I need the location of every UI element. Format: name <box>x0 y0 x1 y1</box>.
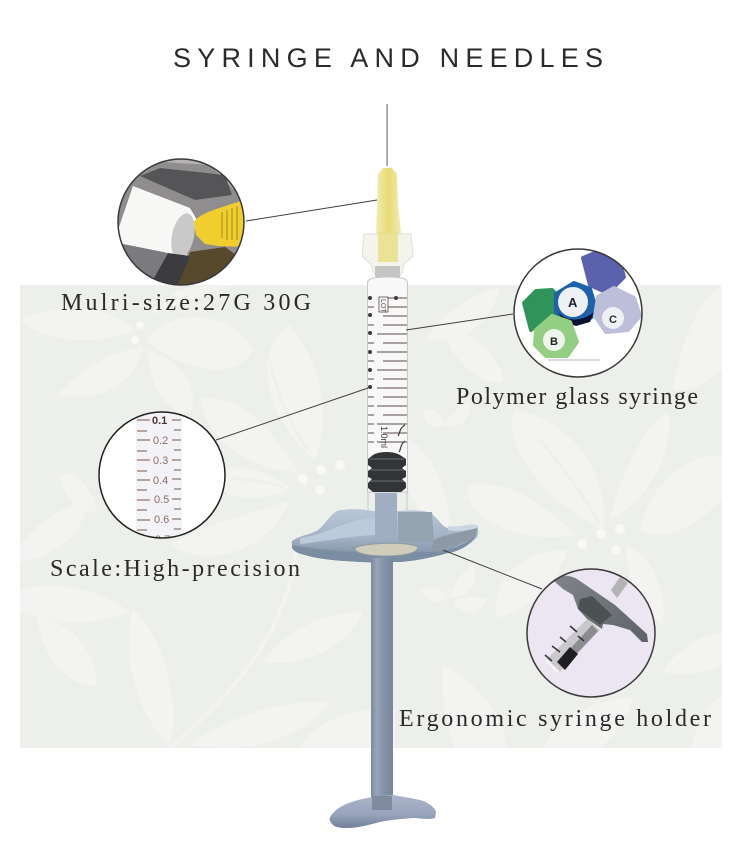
callout: scale close-up: 0.6 <box>154 514 169 526</box>
label: polymer glass syringe: Polymer glass syringe <box>456 384 698 410</box>
callout: polymer spheres: C <box>609 314 617 326</box>
syringe: LOT <box>379 299 386 313</box>
callout: scale close-up: 0.7 <box>155 534 170 546</box>
callout: scale close-up: 0.5 <box>154 494 169 506</box>
title: SYRINGE AND NEEDLES <box>173 43 603 73</box>
callout: scale close-up: 0.1 <box>152 415 167 427</box>
needle hub <box>376 168 401 268</box>
barrel <box>368 277 408 492</box>
plunger thumb rest <box>330 795 436 828</box>
callout: needle close-up <box>118 159 245 285</box>
barrel dots <box>368 296 398 389</box>
background panel: floral pattern <box>20 285 722 748</box>
callout: polymer spheres: A <box>568 295 578 310</box>
label: multi-size: Mulri-size:27G 30G <box>61 290 311 316</box>
callout: scale close-up: 0.3 <box>153 455 168 467</box>
needle <box>386 104 388 166</box>
rubber stopper <box>368 452 406 492</box>
label: scale: Scale:High-precision <box>50 556 300 582</box>
plunger rod <box>371 558 393 808</box>
luer collar <box>362 234 413 278</box>
callout: syringe holder close-up <box>527 569 655 697</box>
callout: polymer spheres: B <box>550 336 558 348</box>
label: ergonomic holder: Ergonomic syringe holder <box>399 706 711 732</box>
callout: scale close-up: 0.2 <box>153 435 168 447</box>
lot box <box>379 297 388 312</box>
plunger sleeve <box>368 492 407 512</box>
callout: scale close-up: 0.4 <box>153 475 168 487</box>
barrel scale marks <box>368 298 407 442</box>
callout: scale close-up <box>99 412 225 546</box>
volume mark: 1.0ml <box>379 426 389 448</box>
finger flange <box>292 509 478 562</box>
leader lines <box>216 200 542 589</box>
syringe <box>292 104 478 828</box>
plunger neck <box>375 493 397 540</box>
callout: polymer spheres <box>514 249 642 377</box>
